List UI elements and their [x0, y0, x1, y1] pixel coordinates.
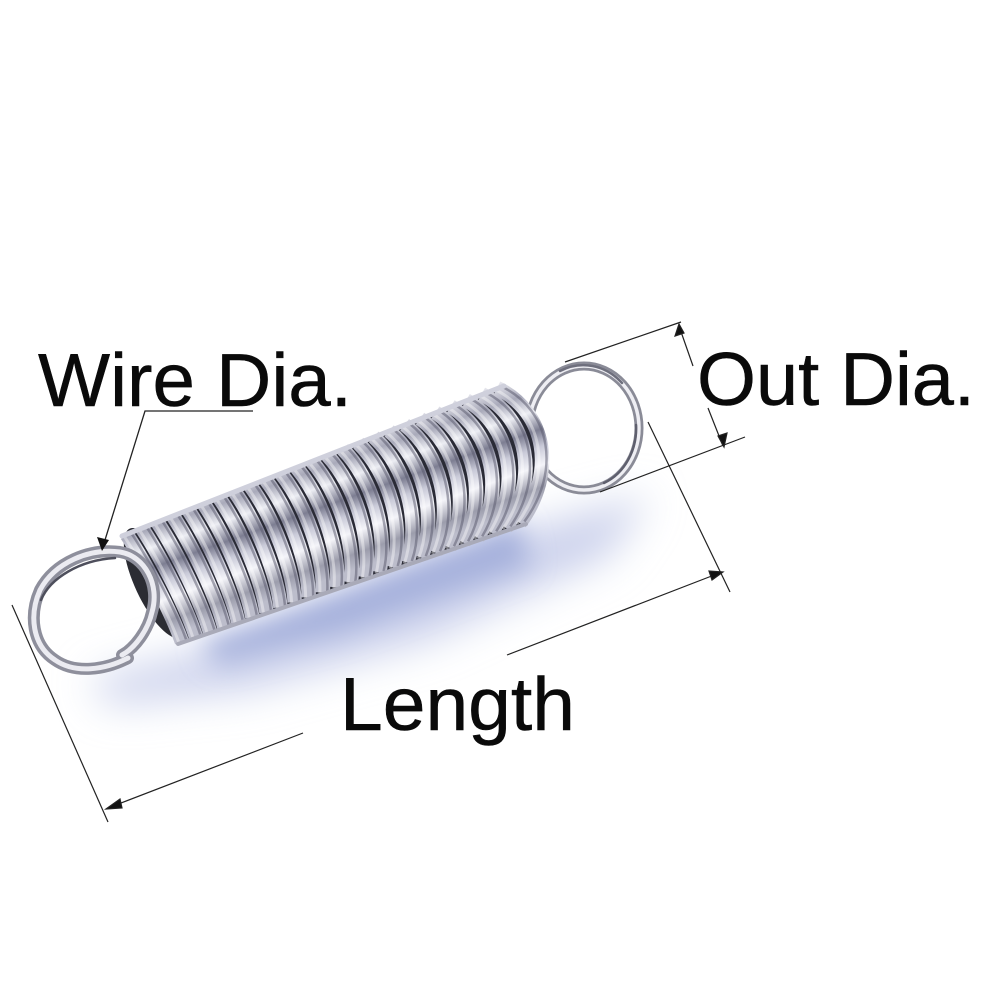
- right hook ring: [529, 365, 639, 490]
- left hook ring: [34, 551, 154, 669]
- spring body: [112, 386, 547, 646]
- arrow: wire diameter leader: [97, 411, 253, 551]
- arrow: outer diameter dimension: [565, 322, 745, 492]
- coil backing: [131, 388, 546, 642]
- label: outer diameter: Out Dia.: [697, 337, 975, 421]
- coils: [124, 386, 547, 643]
- label: length: Length: [340, 662, 575, 746]
- coil end opening: [112, 520, 198, 646]
- arrow: length dimension: [12, 422, 730, 822]
- spring shadow: [90, 495, 650, 705]
- label: wire diameter: Wire Dia.: [38, 338, 352, 422]
- body silhouette edges: [122, 386, 526, 644]
